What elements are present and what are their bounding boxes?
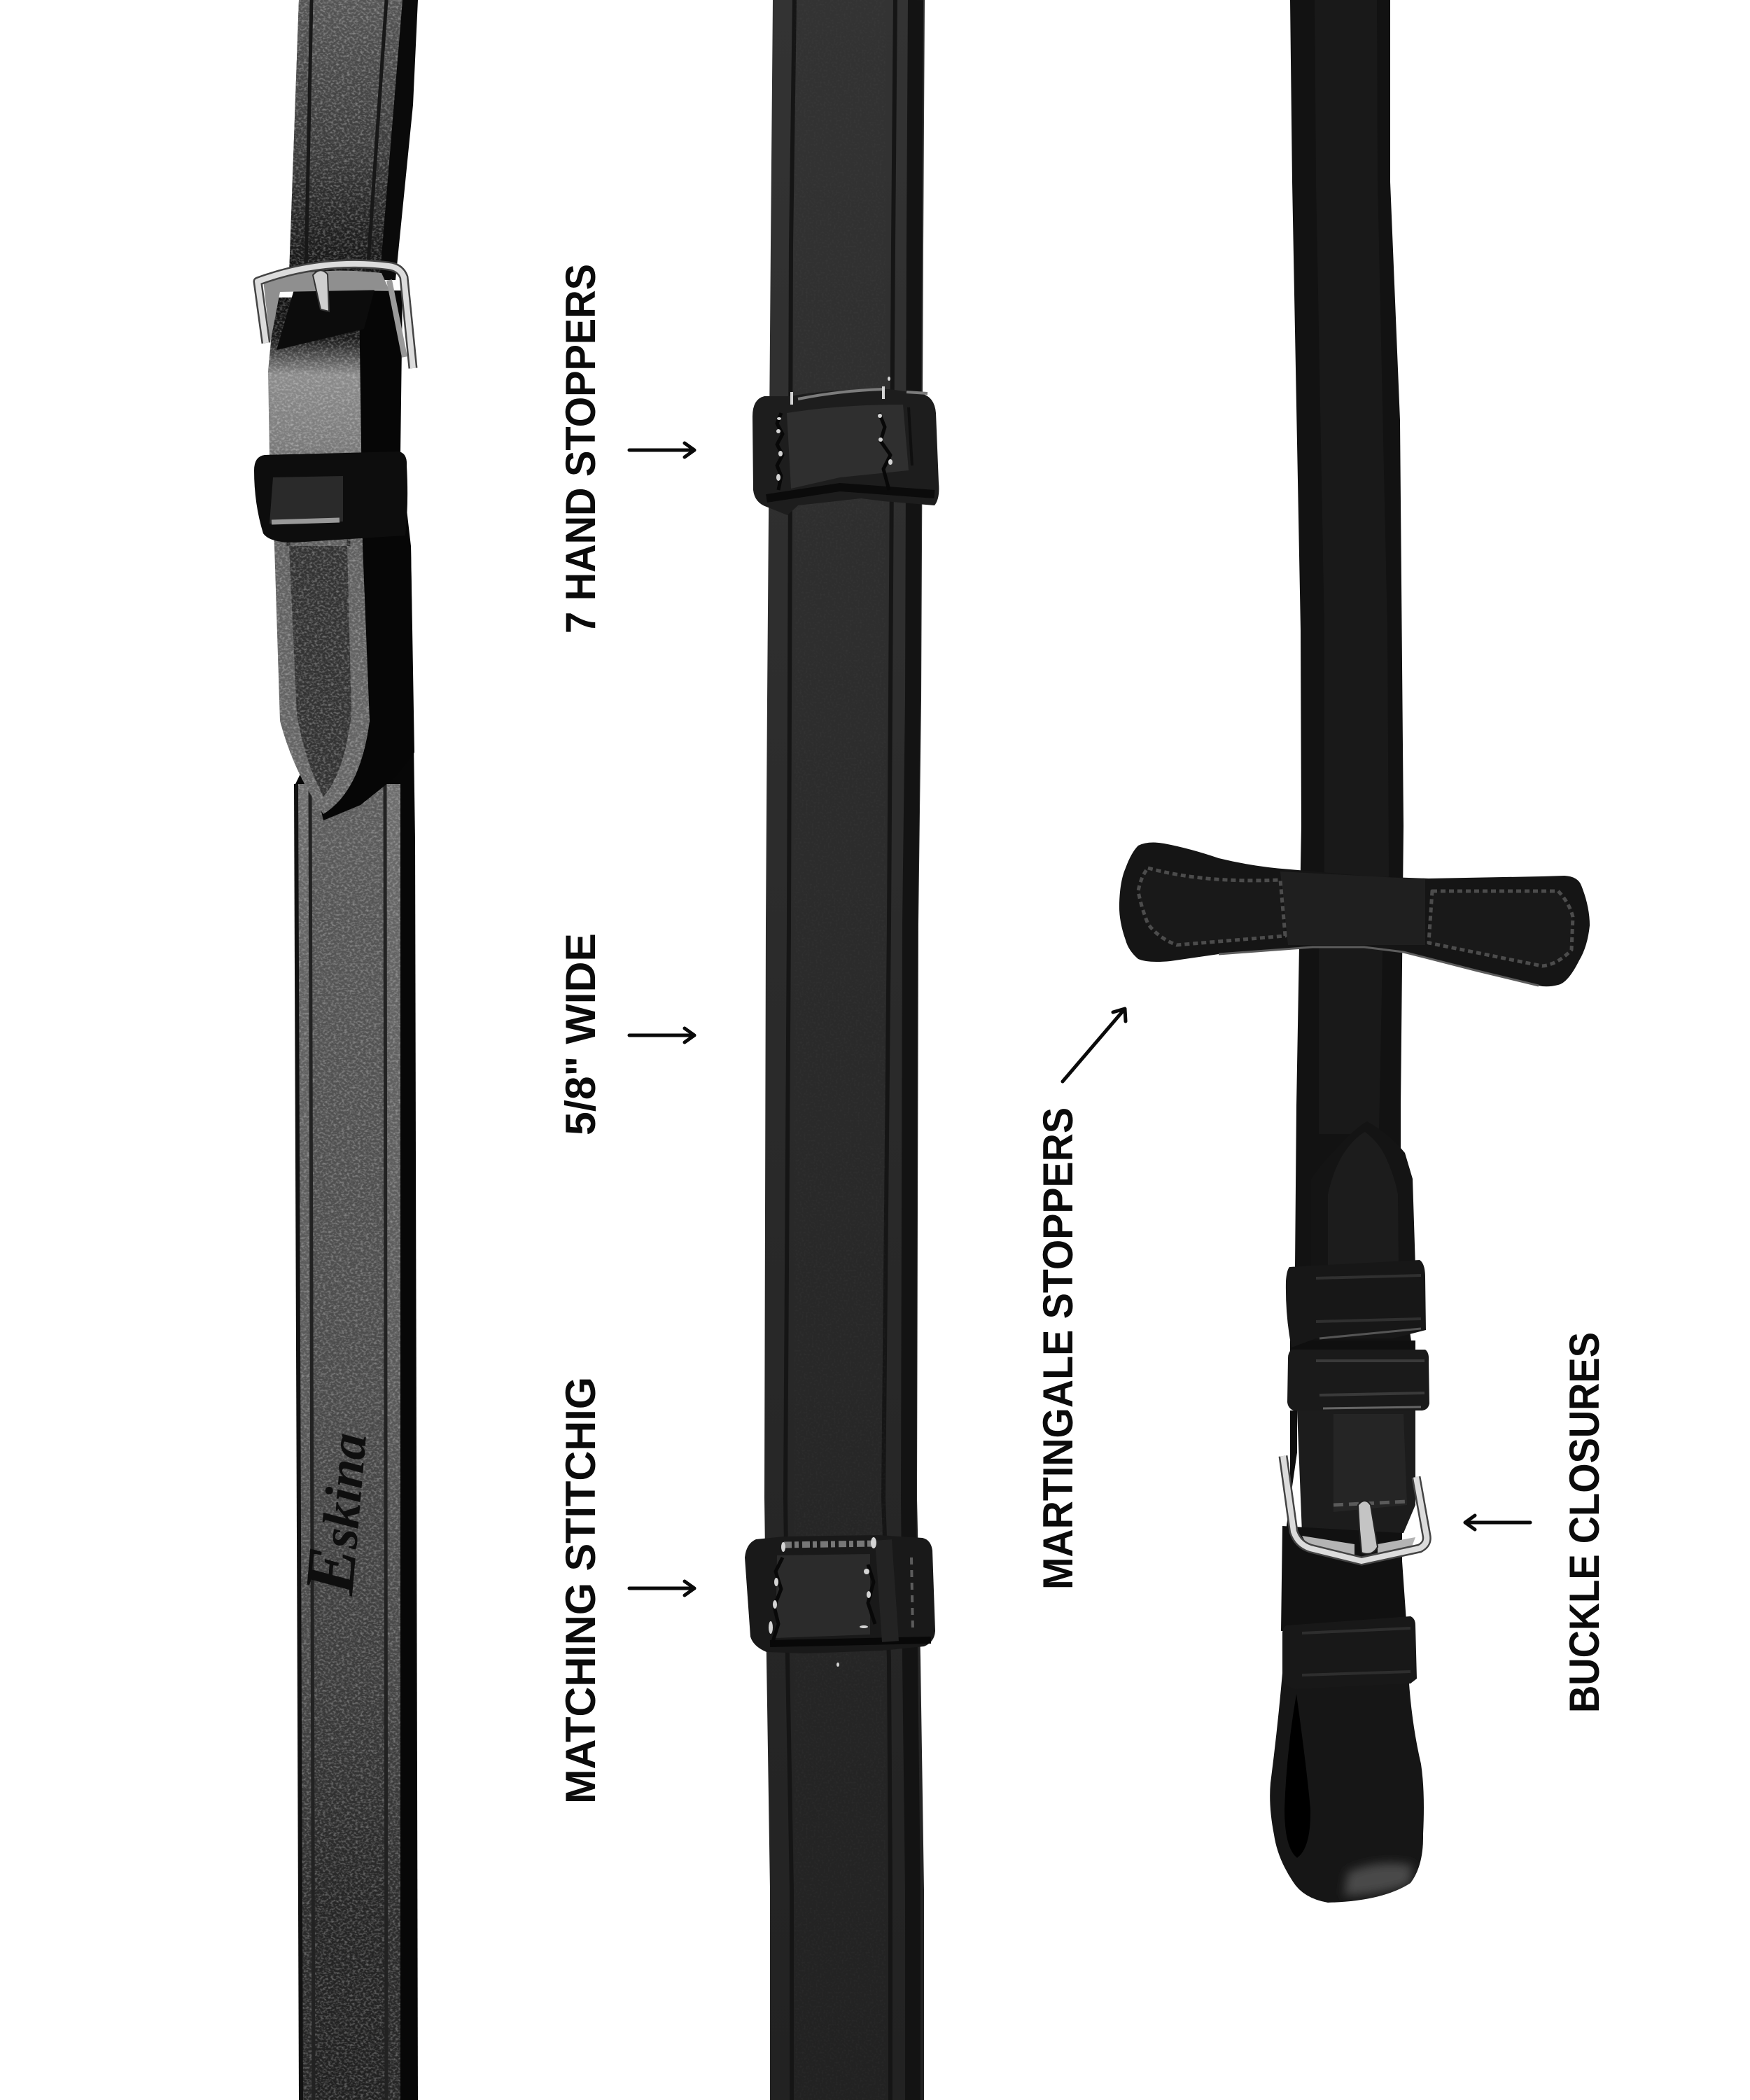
stitches (773, 1558, 875, 1642)
buckle pin (313, 270, 329, 312)
label: matching stitching: MATCHING STITCHIG (557, 1377, 604, 1804)
strap: centre rein with hand stoppers (745, 0, 939, 2100)
label: 7 hand stoppers: 7 HAND STOPPERS (557, 264, 604, 634)
label: martingale stoppers: MARTINGALE STOPPERS (1035, 1107, 1082, 1590)
arrow: to strap width (629, 1028, 694, 1042)
martingale stopper tab (1119, 843, 1590, 986)
icon: silver buckle (1283, 1456, 1427, 1561)
infographic canvas (253, 0, 1599, 2100)
hand stopper: lower (745, 1535, 935, 1667)
strap: right rein with martingale stopper and buckle end (1119, 0, 1590, 1903)
keeper loop (254, 451, 407, 542)
buckle pin (1358, 1501, 1378, 1554)
embossed logo: Eskina (290, 1429, 382, 1598)
strap raised bands (785, 0, 916, 2100)
keeper loop: bottom (1282, 1616, 1417, 1689)
loop end (1270, 1673, 1424, 1903)
arrow: to hand stopper (629, 443, 694, 457)
icon: silver buckle (258, 264, 413, 368)
arrow: to martingale stopper (1063, 1009, 1126, 1082)
strap body (764, 0, 925, 2100)
strap raised band (1315, 0, 1389, 1134)
strap section above buckle (289, 0, 418, 280)
strap body (1290, 0, 1413, 1351)
label: 5/8 inch wide: 5/8" WIDE (557, 933, 604, 1135)
keeper loop: top (1286, 1260, 1426, 1348)
arrow: to stitching (629, 1581, 694, 1595)
stitches (777, 413, 890, 490)
strap below buckle (1281, 1526, 1407, 1631)
keeper loop: middle (1287, 1350, 1429, 1410)
strap under keepers (1284, 1340, 1415, 1540)
stitch highlights (769, 1537, 876, 1667)
lower strap with embossed logo (290, 546, 418, 2100)
stitching panels (1138, 868, 1285, 945)
strap: left rein with buckle (254, 0, 418, 2100)
leather speckle (794, 0, 886, 2100)
arrow: to buckle (1465, 1516, 1530, 1530)
hand stopper: upper (752, 377, 939, 515)
label: buckle closures: BUCKLE CLOSURES (1561, 1332, 1608, 1713)
stitch highlights (776, 377, 892, 481)
loop hole (1284, 1694, 1310, 1858)
strap keeper flap (266, 290, 414, 820)
buckle strap end tab (1311, 1121, 1415, 1267)
